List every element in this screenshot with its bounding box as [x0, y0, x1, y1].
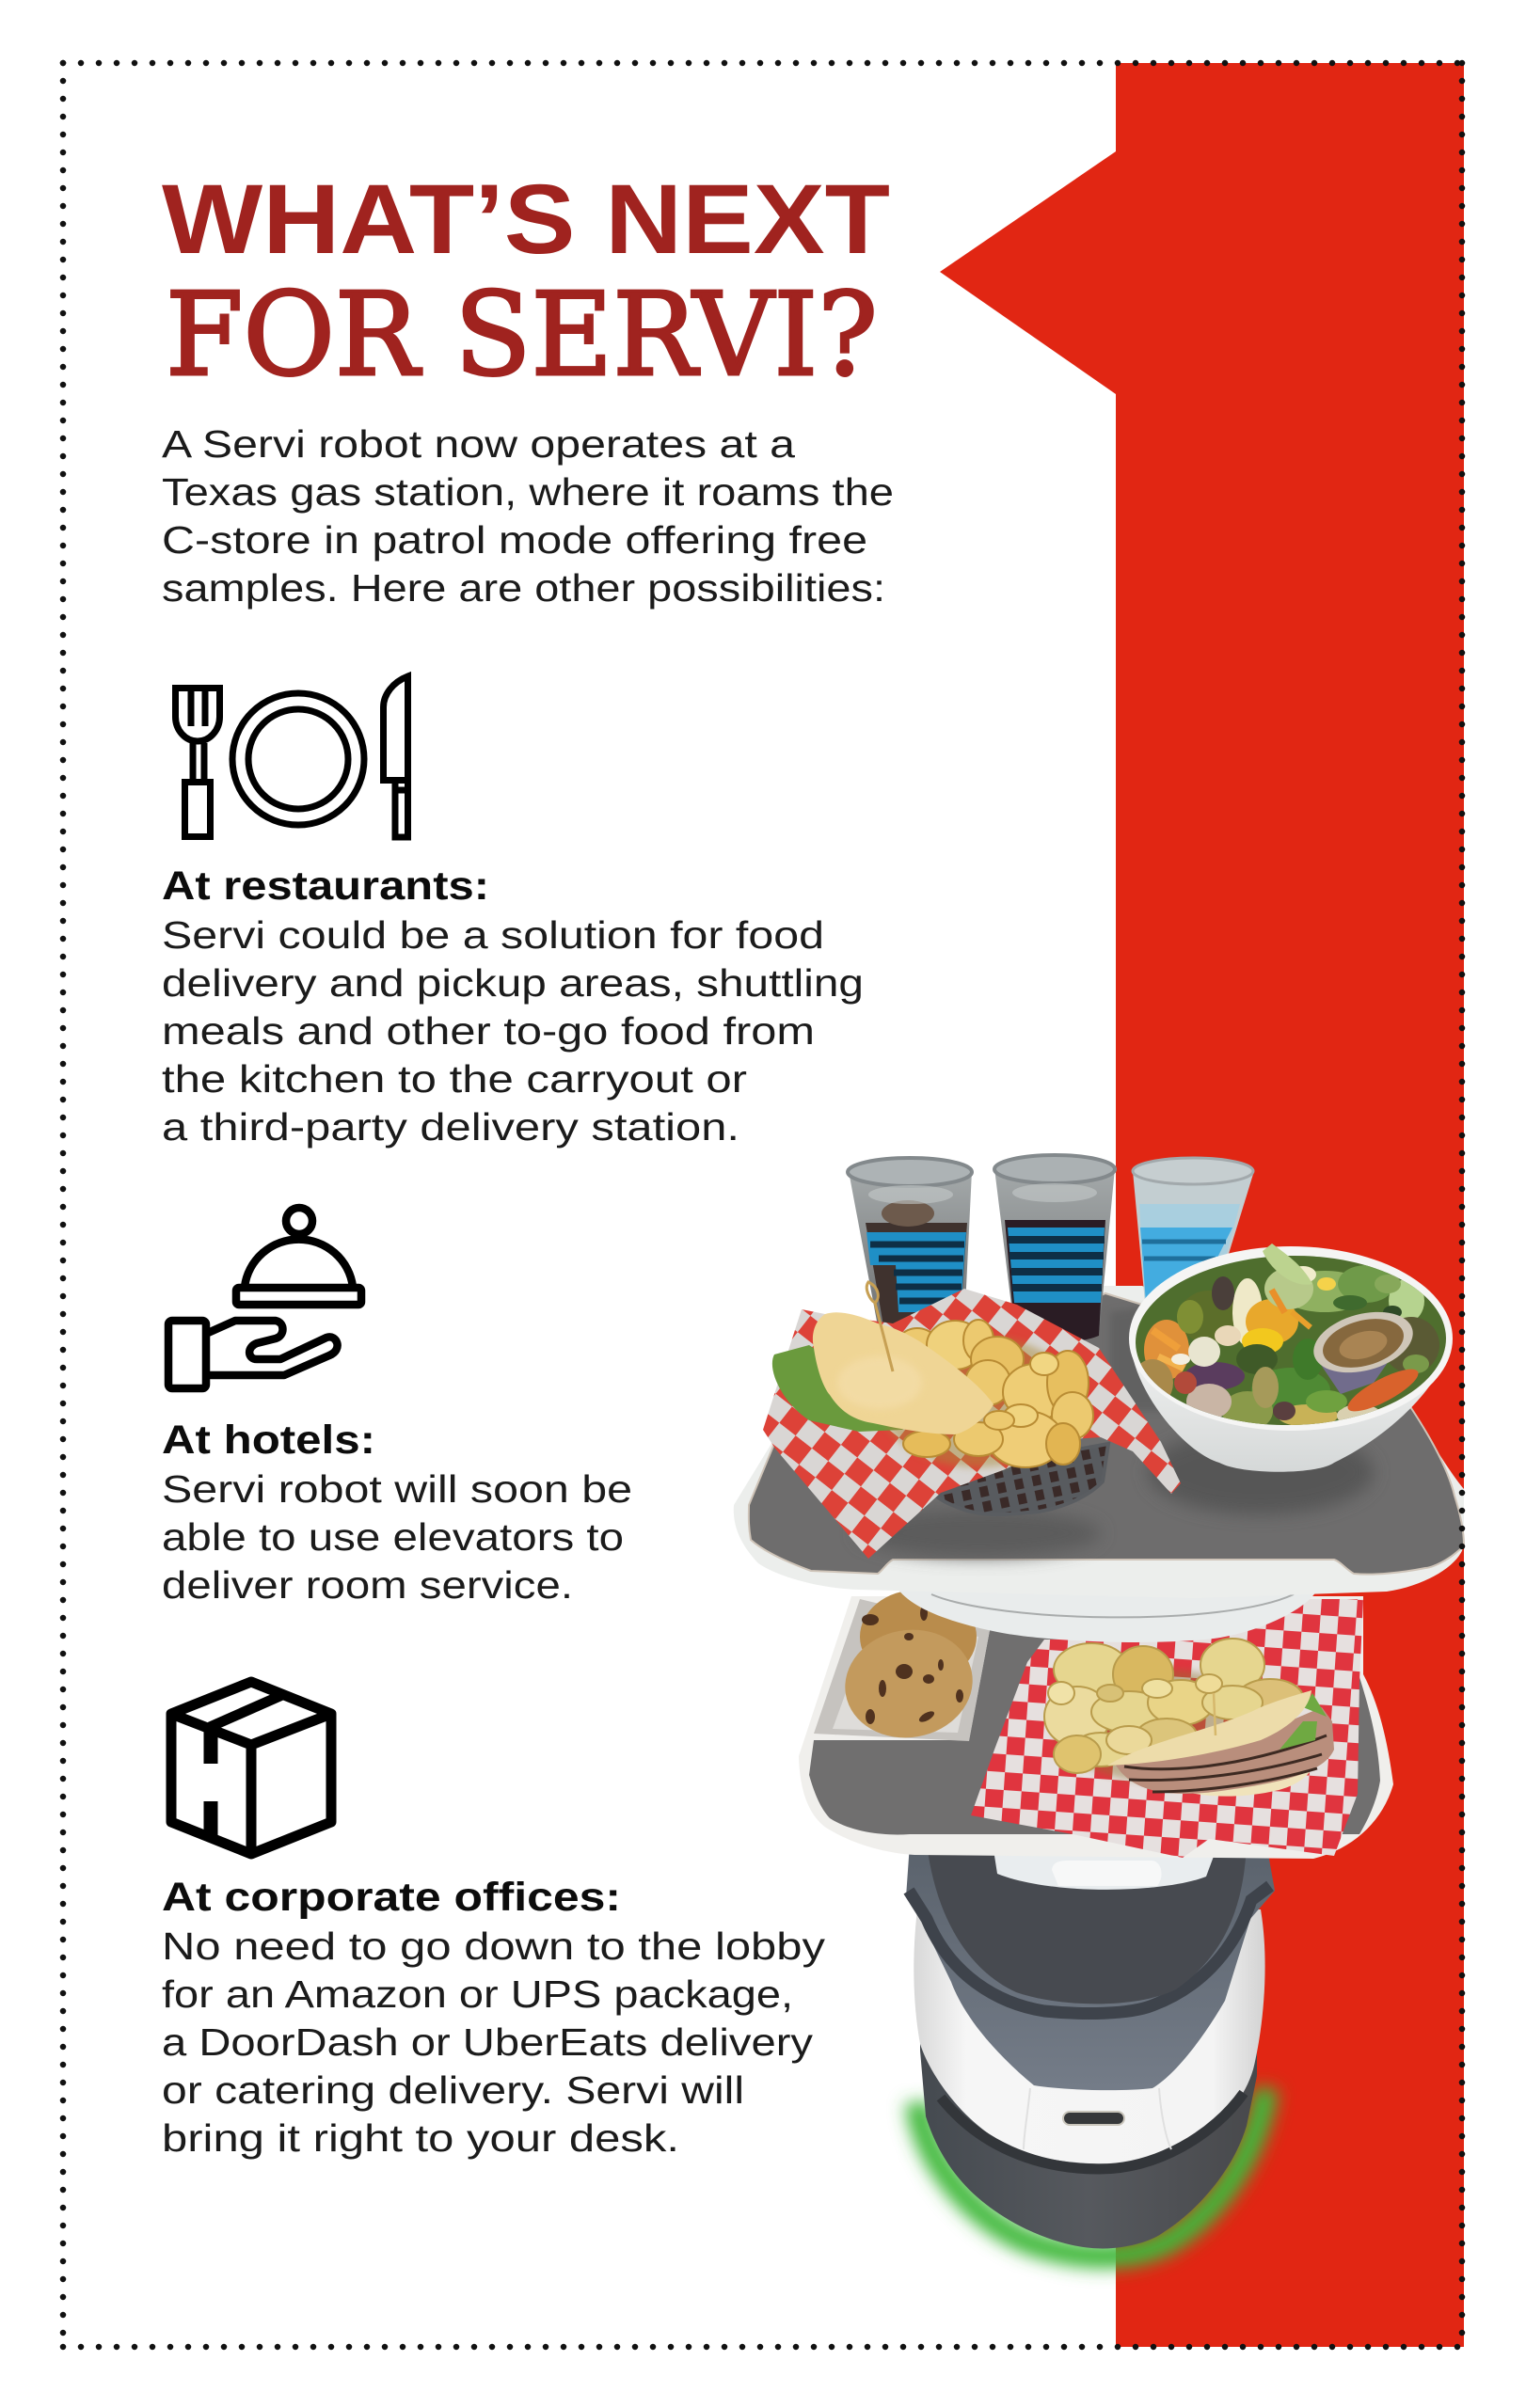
panel: red side band with arrow: [940, 63, 1464, 2347]
text: corporate offices: or catering delivery. Servi will: [162, 2068, 744, 2112]
text: restaurants: Servi could be a solution for food: [162, 913, 824, 957]
cup three: [1133, 1158, 1254, 1303]
text: corporate offices: for an Amazon or UPS package,: [162, 1972, 793, 2016]
text: corporate offices: a DoorDash or UberEats delivery: [162, 2020, 814, 2064]
text: restaurants: [162, 913, 864, 1149]
text: restaurants: delivery and pickup areas, shuttling: [162, 961, 864, 1005]
icon: hand holding cloche: [168, 1208, 361, 1388]
robot sensor: [1063, 2112, 1124, 2125]
text: corporate offices: bring it right to your desk.: [162, 2116, 679, 2160]
icon: fork, plate and knife: [175, 676, 408, 837]
upper tray: [734, 1286, 1464, 1598]
basket: [927, 1444, 1108, 1514]
salad contents: [1129, 1251, 1454, 1431]
heading: at restaurants: At restaurants:: [162, 863, 489, 909]
cookies: [836, 1590, 981, 1748]
intro text: A Servi robot now operates at a: [162, 422, 795, 466]
text: hotels: Servi robot will soon be: [162, 1467, 632, 1511]
title line two: FOR SERVI?: [166, 268, 878, 402]
salad bowl: [1129, 1244, 1454, 1472]
text: restaurants: meals and other to-go food from: [162, 1009, 815, 1053]
robot dark bucket: [906, 1844, 1275, 2090]
heading: at corporate offices: At corporate offices:: [162, 1875, 621, 1920]
text: restaurants: the kitchen to the carryout or: [162, 1057, 747, 1101]
text: corporate offices: [162, 1925, 826, 2160]
title: [162, 165, 890, 402]
sauce cup: [1307, 1302, 1420, 1394]
upper checkered paper: [763, 1289, 1181, 1559]
intro text: Texas gas station, where it roams the: [162, 470, 894, 514]
robot neck below upper tray: [898, 1590, 1317, 1642]
lower checkered paper: [971, 1599, 1363, 1858]
intro text: [162, 422, 894, 610]
cups: [848, 1155, 1254, 1342]
icon: package box: [171, 1682, 331, 1854]
lower tray: [799, 1596, 1393, 1859]
intro text: C-store in patrol mode offering free: [162, 518, 867, 562]
text: hotels: deliver room service.: [162, 1563, 573, 1607]
intro text: samples. Here are other possibilities:: [162, 566, 885, 610]
text: hotels: [162, 1467, 632, 1607]
illustration: Servi robot carrying food: [734, 1155, 1464, 2256]
robot base with green glow: [917, 2041, 1266, 2256]
text: restaurants: a third-party delivery station.: [162, 1105, 739, 1149]
cup two: [994, 1155, 1115, 1342]
title line one: WHAT’S NEXT: [162, 165, 890, 275]
text: hotels: able to use elevators to: [162, 1515, 624, 1559]
lower chips and sandwich: [1044, 1639, 1334, 1797]
robot white collar: [914, 1909, 1265, 2169]
cup one: [848, 1158, 972, 1331]
heading: at hotels: At hotels:: [162, 1418, 375, 1463]
text: corporate offices: No need to go down to the lobby: [162, 1925, 826, 1968]
upper chips and pita: [772, 1282, 1093, 1467]
